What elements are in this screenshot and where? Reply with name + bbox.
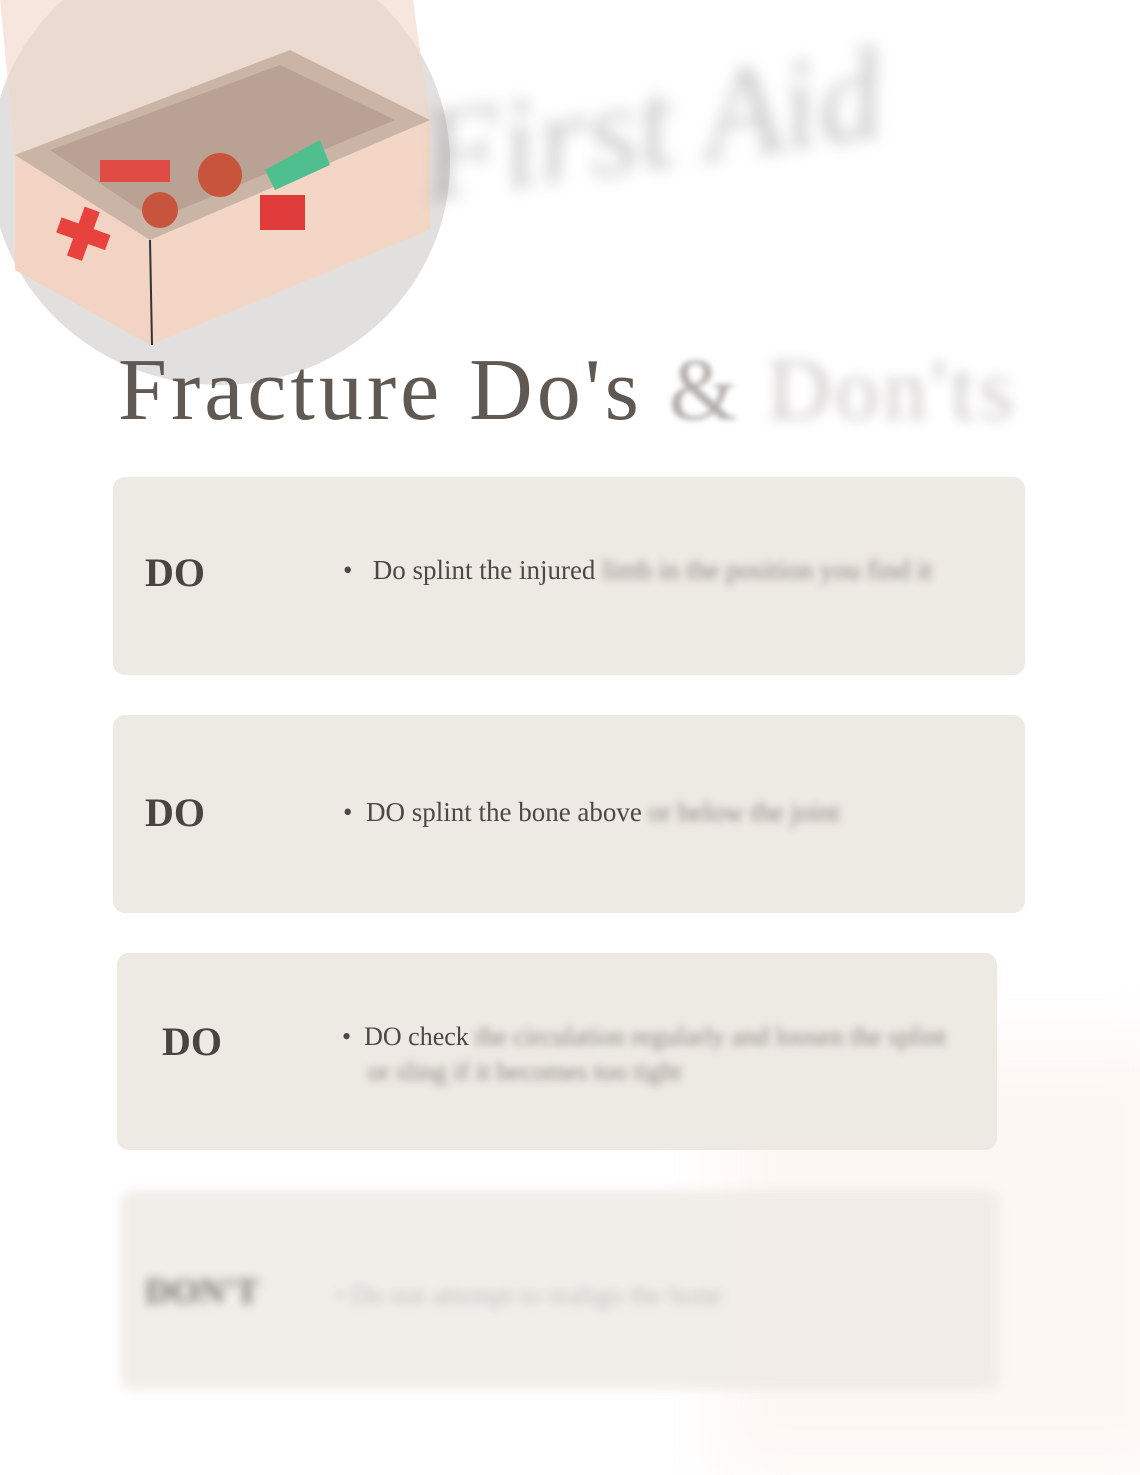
label DO: DO (145, 550, 205, 595)
panel: do 3 (117, 953, 997, 1150)
panel: do 2 (113, 715, 1025, 913)
text: bullet 1: • Do splint the injured limb in the position you find it (343, 555, 932, 585)
panel: do 1 (113, 477, 1025, 675)
label DO: DO (162, 1019, 222, 1064)
title (118, 342, 1017, 439)
text: bullet 4: • Do not attempt to realign the bone (335, 1280, 722, 1310)
label DO: DO (145, 790, 205, 835)
icon: first aid kit circle (0, 0, 450, 385)
label DON'T: DON'T (145, 1271, 259, 1311)
title: Don'ts (767, 342, 1017, 439)
text: bullet 3 (342, 1022, 948, 1088)
script heading: First Aid: First Aid (412, 21, 891, 229)
background blush (720, 1040, 1140, 1475)
text: bullet 3: • DO check the circulation regularly and loosen the splint (342, 1022, 946, 1051)
title: Fracture Do's (118, 342, 643, 439)
text: bullet 3: or sling if it becomes too tight (368, 1057, 681, 1086)
title: & (669, 342, 741, 439)
panel: don't (120, 1190, 1000, 1390)
text: bullet 2: • DO splint the bone above or below the joint (343, 797, 840, 827)
